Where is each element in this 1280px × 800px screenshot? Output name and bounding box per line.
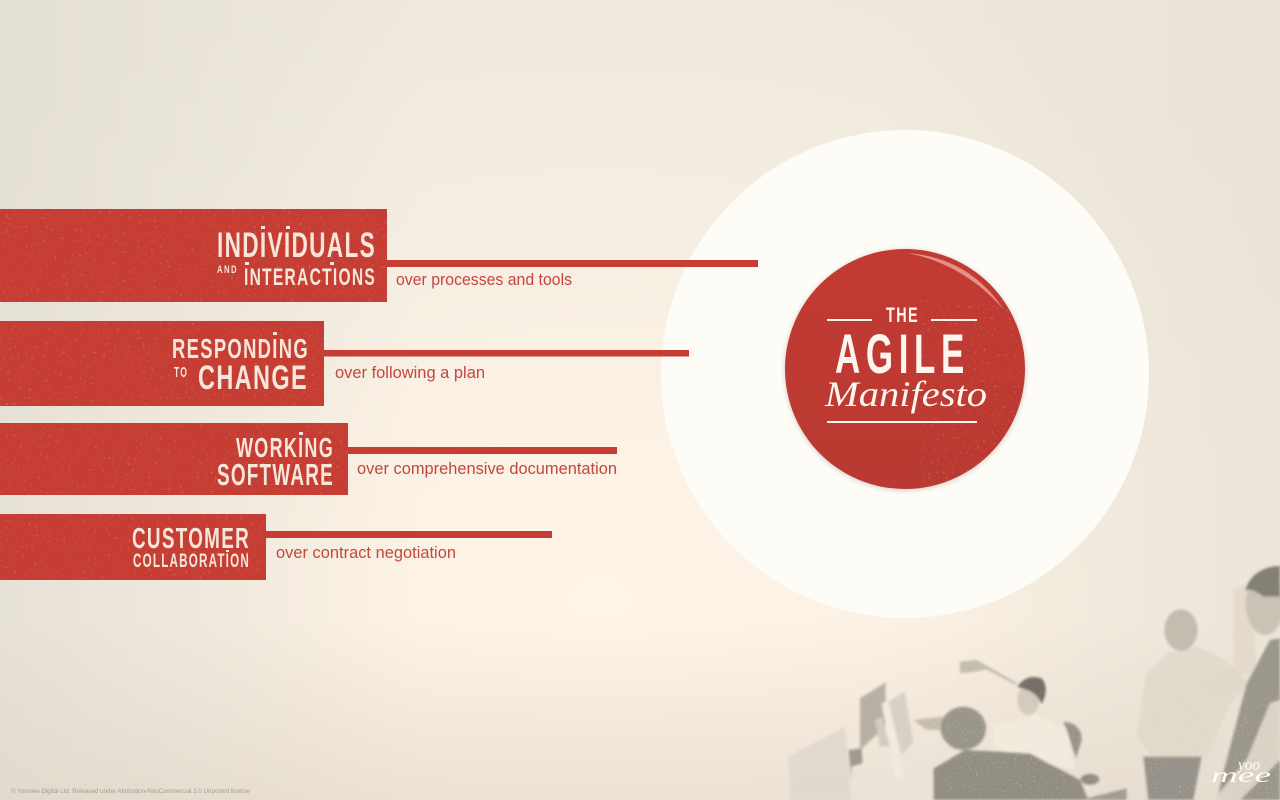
footer licence: © Yoomee Digital Ltd. Released under Attribution-NonCommercial 3.0 Unported license — [11, 787, 250, 795]
heading: working software: SOFTWARE — [217, 457, 334, 492]
office team photo — [788, 566, 1280, 800]
bar: individuals and interactions — [0, 209, 758, 302]
heading: responding to change: TO — [174, 364, 188, 381]
heading: individuals and interactions — [217, 226, 376, 291]
heading: responding to change: CHANGE — [198, 359, 308, 397]
medallion: the agile manifesto — [784, 249, 1030, 491]
bar: customer collaboration — [0, 514, 552, 580]
text: over contract negotiation: over contract negotiation — [276, 544, 456, 562]
bar: responding to change — [0, 321, 689, 406]
heading: customer collaboration: CUSTOMER — [132, 523, 250, 555]
heading: individuals and interactions: INTERACTIONS — [244, 264, 376, 291]
script: manifesto: Manifesto — [824, 374, 987, 414]
white halo circle — [661, 130, 1149, 618]
heading: working software — [217, 432, 334, 492]
heading: individuals and interactions: INDIVIDUALS — [217, 226, 376, 265]
logo: yoomee — [1211, 755, 1271, 787]
heading: the: THE — [886, 304, 919, 327]
text: over following a plan: over following a plan — [335, 364, 485, 382]
text: over processes and tools: over processes and tools — [396, 271, 572, 289]
logo: yoomee: mee — [1211, 765, 1271, 787]
heading: customer collaboration: COLLABORATION — [133, 551, 250, 572]
text: over comprehensive documentation: over comprehensive documentation — [357, 460, 617, 478]
heading: working software: WORKING — [236, 432, 334, 463]
logo: yoomee: yoo — [1236, 755, 1260, 774]
heading: agile: AGILE — [835, 322, 970, 385]
heading: responding to change: RESPONDING — [172, 333, 309, 364]
heading: individuals and interactions: AND — [217, 264, 238, 276]
bar texture — [0, 200, 390, 590]
photo grain — [880, 690, 1280, 800]
heading: customer collaboration — [132, 523, 250, 572]
bar: working software — [0, 423, 617, 495]
heading: responding to change — [172, 332, 309, 397]
